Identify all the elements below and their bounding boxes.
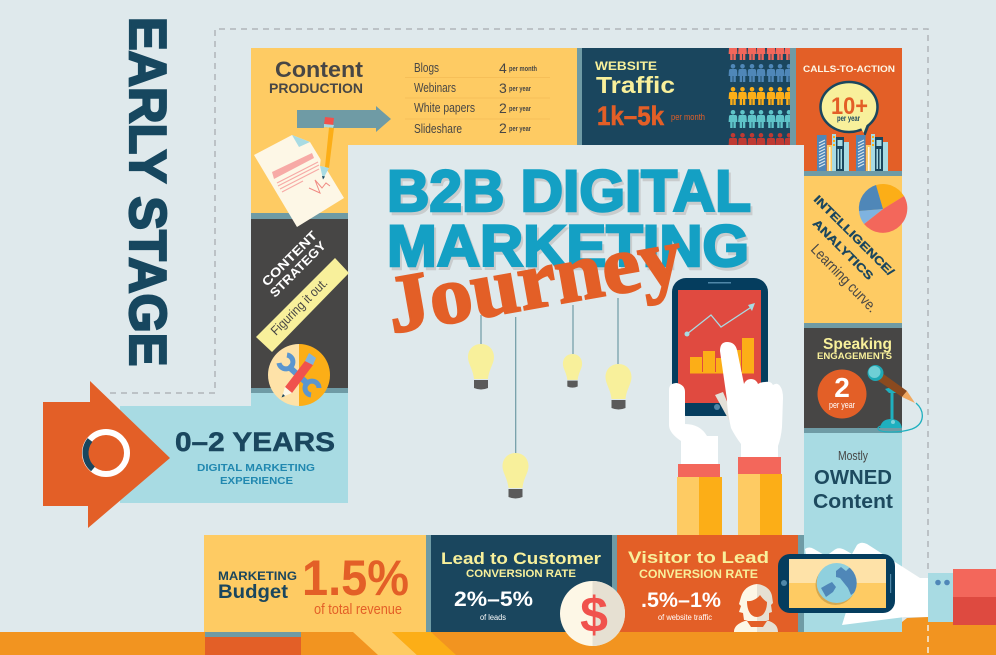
lead figure: of leads <box>480 613 506 622</box>
budget figure: 1.5% <box>302 550 409 606</box>
badge: 2 per year: 2 <box>834 372 850 403</box>
budget heading: Budget <box>218 581 289 603</box>
ribbon: figuring it out: Figuring it out. <box>268 275 330 338</box>
bulb 3 <box>563 354 582 388</box>
icon: progress ring <box>85 432 127 474</box>
speaking heading: Speaking <box>823 336 892 353</box>
panel: 0-2 years experience <box>120 393 348 503</box>
icon: dollar coin <box>560 581 625 646</box>
paper fold <box>292 135 310 147</box>
content strategy heading: STRATEGY <box>267 238 329 300</box>
panel: content strategy <box>251 213 349 393</box>
paper sheet <box>254 135 344 227</box>
content frequency list: per year <box>509 124 531 133</box>
traffic heading <box>595 59 675 98</box>
speech bubble: 10+ per year: 10+ <box>831 93 868 120</box>
vertical heading: early stage: EARLY STAGE <box>119 17 177 366</box>
title: B2B DIGITAL <box>387 159 751 224</box>
content frequency list: 4 <box>499 60 507 76</box>
bulb 2 <box>502 453 528 498</box>
icon: tools badge <box>268 344 330 406</box>
panel: speaking engagements <box>804 328 902 433</box>
content frequency list <box>405 60 550 136</box>
bulb 1 <box>468 344 494 390</box>
calls-to-action heading: CALLS-TO-ACTION <box>803 64 895 75</box>
signature <box>309 180 330 193</box>
traffic figure: per month <box>671 112 705 122</box>
cuff <box>928 573 953 622</box>
learning curve note: Learning curve. <box>807 241 880 316</box>
icon: hand holding phone <box>778 543 996 625</box>
panel: owned content <box>804 433 902 632</box>
content frequency list: White papers <box>414 100 475 115</box>
phone screen <box>789 559 886 608</box>
content frequency list: 3 <box>499 80 507 96</box>
phone details <box>781 574 891 593</box>
panel: content production <box>251 48 577 213</box>
visitor heading <box>628 548 769 581</box>
icon: left hand <box>669 383 722 535</box>
panel: owned content: Mostly <box>838 448 868 463</box>
heading: content production: Content <box>275 57 364 82</box>
icon: microphone <box>868 365 922 432</box>
globe <box>816 563 858 605</box>
traffic heading: Traffic <box>596 72 675 98</box>
intelligence heading: INTELLIGENCE/ <box>811 194 896 279</box>
speaking heading <box>817 336 892 362</box>
panel: marketing budget <box>204 535 426 632</box>
hand <box>805 543 928 625</box>
experience label: DIGITAL MARKETING <box>197 462 315 474</box>
ribbon: figuring it out <box>256 258 349 352</box>
panel: website traffic <box>577 48 796 145</box>
years heading: 0–2 YEARS <box>175 427 335 457</box>
title: B2B DIGITAL <box>389 162 753 227</box>
budget heading: MARKETING <box>218 571 297 583</box>
icon: tablet with chart <box>672 278 768 416</box>
bar chart <box>690 338 754 374</box>
visitor figure <box>641 589 721 622</box>
panel: owned content: Content <box>813 491 893 513</box>
pictogram: people grid <box>728 48 790 145</box>
traffic heading: WEBSITE <box>595 59 657 73</box>
heading: content production <box>269 57 364 96</box>
content frequency list: per month <box>509 64 537 73</box>
content frequency list: 2 <box>499 120 507 136</box>
bottom floor <box>0 617 996 655</box>
arrow: early stage marker <box>43 381 170 528</box>
paper lines <box>272 153 319 192</box>
content frequency list: per year <box>509 84 531 93</box>
visitor figure: .5%–1% <box>641 589 721 612</box>
icon: dollar coin: $ <box>580 587 608 643</box>
visitor heading: Visitor to Lead <box>628 548 769 567</box>
experience label: EXPERIENCE <box>220 475 293 487</box>
content frequency list: Webinars <box>414 80 456 95</box>
icon: woman <box>734 584 778 632</box>
panel: intelligence and analytics <box>804 176 907 328</box>
title: MARKETING <box>387 214 749 279</box>
visitor heading: CONVERSION RATE <box>639 569 758 581</box>
content strategy heading: CONTENT <box>259 228 320 289</box>
lead figure: 2%–5% <box>454 588 533 611</box>
pencil <box>320 117 334 180</box>
lead heading: CONVERSION RATE <box>466 568 576 580</box>
content strategy heading <box>259 228 329 300</box>
title <box>379 159 753 351</box>
intelligence heading: ANALYTICS <box>810 218 875 283</box>
budget heading <box>218 571 297 603</box>
phone <box>778 554 895 613</box>
intelligence heading <box>810 194 896 283</box>
illustration: paper and pencil <box>254 117 344 227</box>
experience label <box>197 462 315 487</box>
lead heading: Lead to Customer <box>441 549 601 568</box>
speech bubble: 10+ per year <box>820 82 878 137</box>
traffic figure <box>597 101 705 131</box>
lead figure <box>454 588 533 622</box>
title: journey: Journey <box>379 209 689 351</box>
lead heading <box>441 549 601 580</box>
budget figure: of total revenue <box>314 601 402 618</box>
badge: 2 per year: per year <box>829 400 855 411</box>
content frequency list: Slideshare <box>414 121 462 136</box>
content frequency list: Blogs <box>414 60 439 75</box>
speaking heading: ENGAGEMENTS <box>817 351 892 362</box>
content frequency list: 2 <box>499 100 507 116</box>
heading: content production: PRODUCTION <box>269 80 363 96</box>
hanging light bulbs <box>468 298 632 498</box>
speech bubble: 10+ per year: per year <box>837 114 860 123</box>
icon: books <box>817 134 888 171</box>
sleeve <box>953 569 996 625</box>
arrowhead <box>684 303 755 336</box>
line chart <box>687 306 753 334</box>
title: MARKETING <box>389 217 751 282</box>
icon: right pointing hand <box>715 342 783 535</box>
traffic figure: 1k–5k <box>597 101 665 131</box>
pie chart <box>859 184 907 233</box>
panel: visitor to lead <box>617 535 804 632</box>
panel: lead to customer <box>426 535 617 632</box>
badge: 2 per year <box>818 370 866 418</box>
visitor figure: of website traffic <box>658 612 713 622</box>
bulb 4 <box>606 364 632 410</box>
panel: calls to action <box>796 48 902 176</box>
content frequency list: per year <box>509 104 531 113</box>
dashed journey path <box>110 29 928 573</box>
arrow <box>297 106 391 132</box>
panel: owned content: OWNED <box>814 467 892 489</box>
